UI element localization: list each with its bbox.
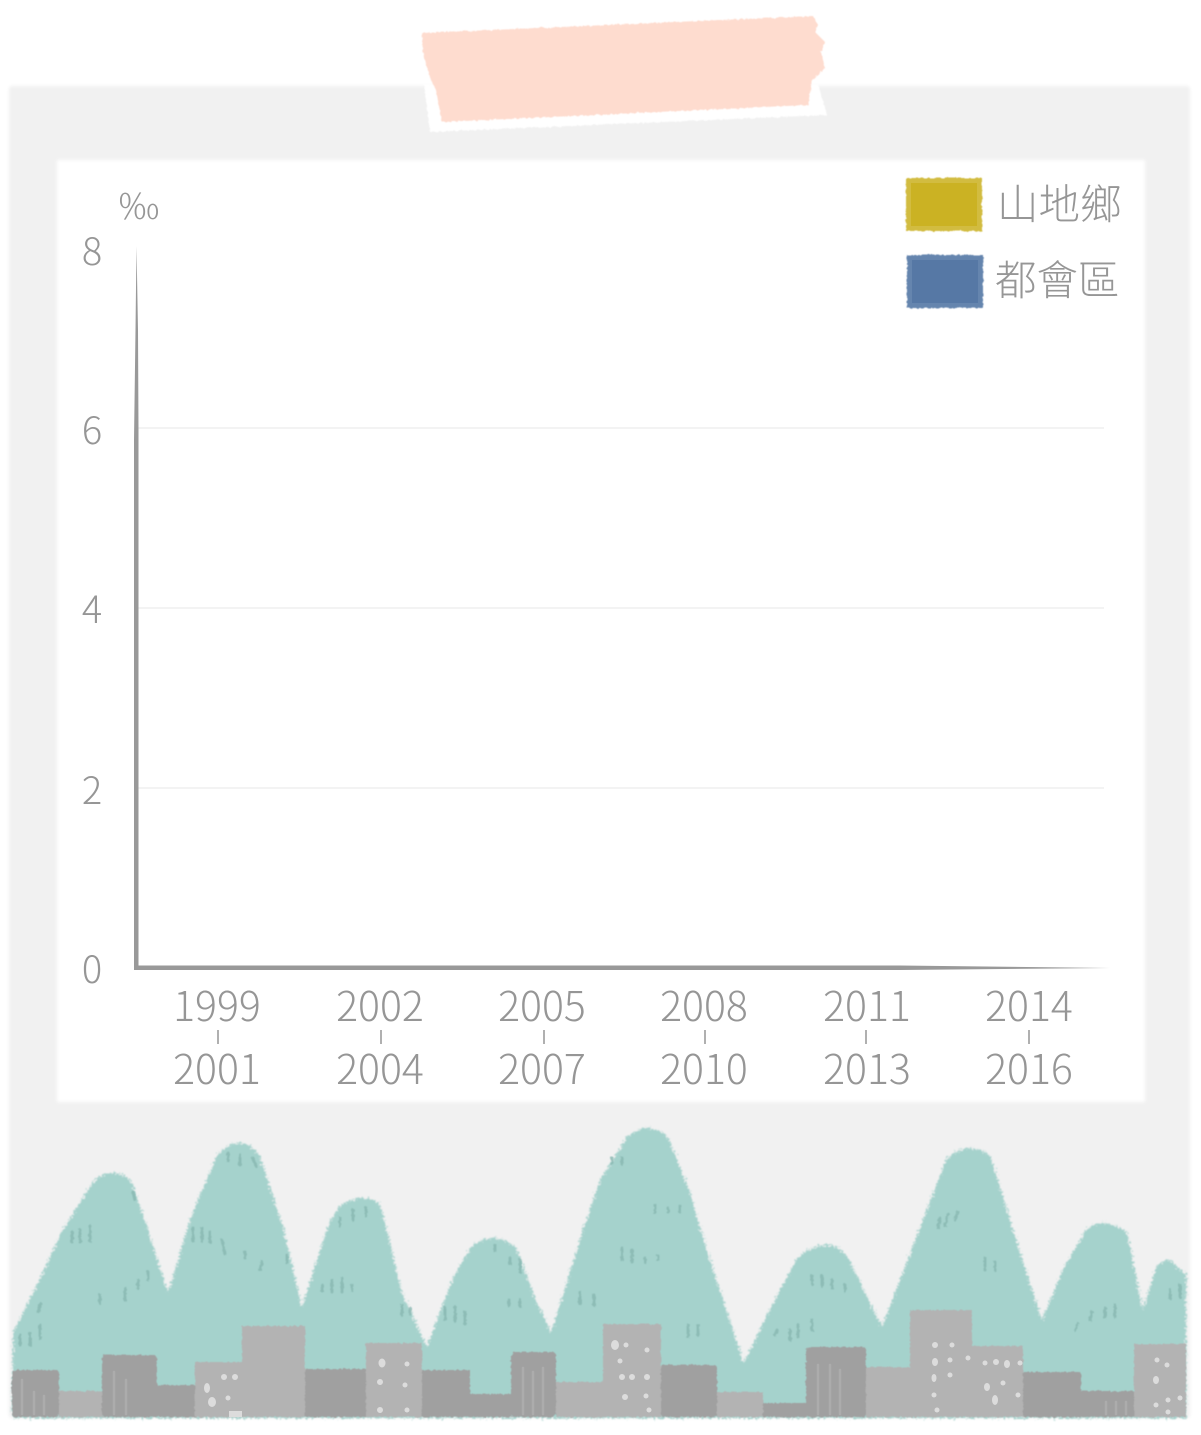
x axis period labels: 2013 [823, 1036, 911, 1096]
x axis period labels: 2004 [336, 1036, 424, 1096]
building windows [204, 1340, 1182, 1417]
x axis period labels: 2001 [173, 1036, 261, 1096]
y axis labels: 0 [82, 939, 102, 994]
light buildings [59, 1310, 1186, 1417]
legend: 山地鄉 [906, 171, 1122, 231]
x axis line [134, 966, 1110, 970]
y axis labels: 4 [82, 579, 102, 634]
chart panel [57, 160, 1145, 1102]
x axis period labels [173, 973, 1073, 1096]
chart [82, 179, 1110, 1096]
buildings [12, 1310, 1186, 1417]
washi tape [422, 16, 827, 132]
y axis unit: ‰ [118, 179, 160, 230]
y axis labels [82, 221, 102, 994]
x axis period labels: 2010 [660, 1036, 748, 1096]
legend: 山地鄉: 山地鄉 [997, 171, 1122, 231]
y axis labels: 2 [82, 760, 102, 815]
x axis period labels: 1999 [173, 973, 261, 1033]
y axis labels: 6 [82, 400, 102, 455]
grid lines [138, 428, 1104, 788]
x axis period labels: 2016 [985, 1036, 1073, 1096]
legend [906, 171, 1122, 308]
x axis period labels: 2014 [985, 973, 1073, 1033]
mountain grass marks [20, 1153, 1180, 1345]
dark buildings [12, 1347, 1134, 1417]
y axis line [134, 246, 138, 968]
x axis period labels: 2008 [660, 973, 748, 1033]
y axis labels: 8 [82, 221, 102, 276]
building facade stripes [22, 1365, 1126, 1414]
legend: 都會區 [907, 247, 1120, 308]
x axis period labels: 2011 [823, 973, 911, 1033]
x axis period labels: 2002 [336, 973, 424, 1033]
x axis period labels: 2005 [498, 973, 586, 1033]
legend: 都會區: 都會區 [995, 247, 1120, 307]
x axis period labels: 2007 [498, 1036, 586, 1096]
mountains [12, 1128, 1186, 1418]
